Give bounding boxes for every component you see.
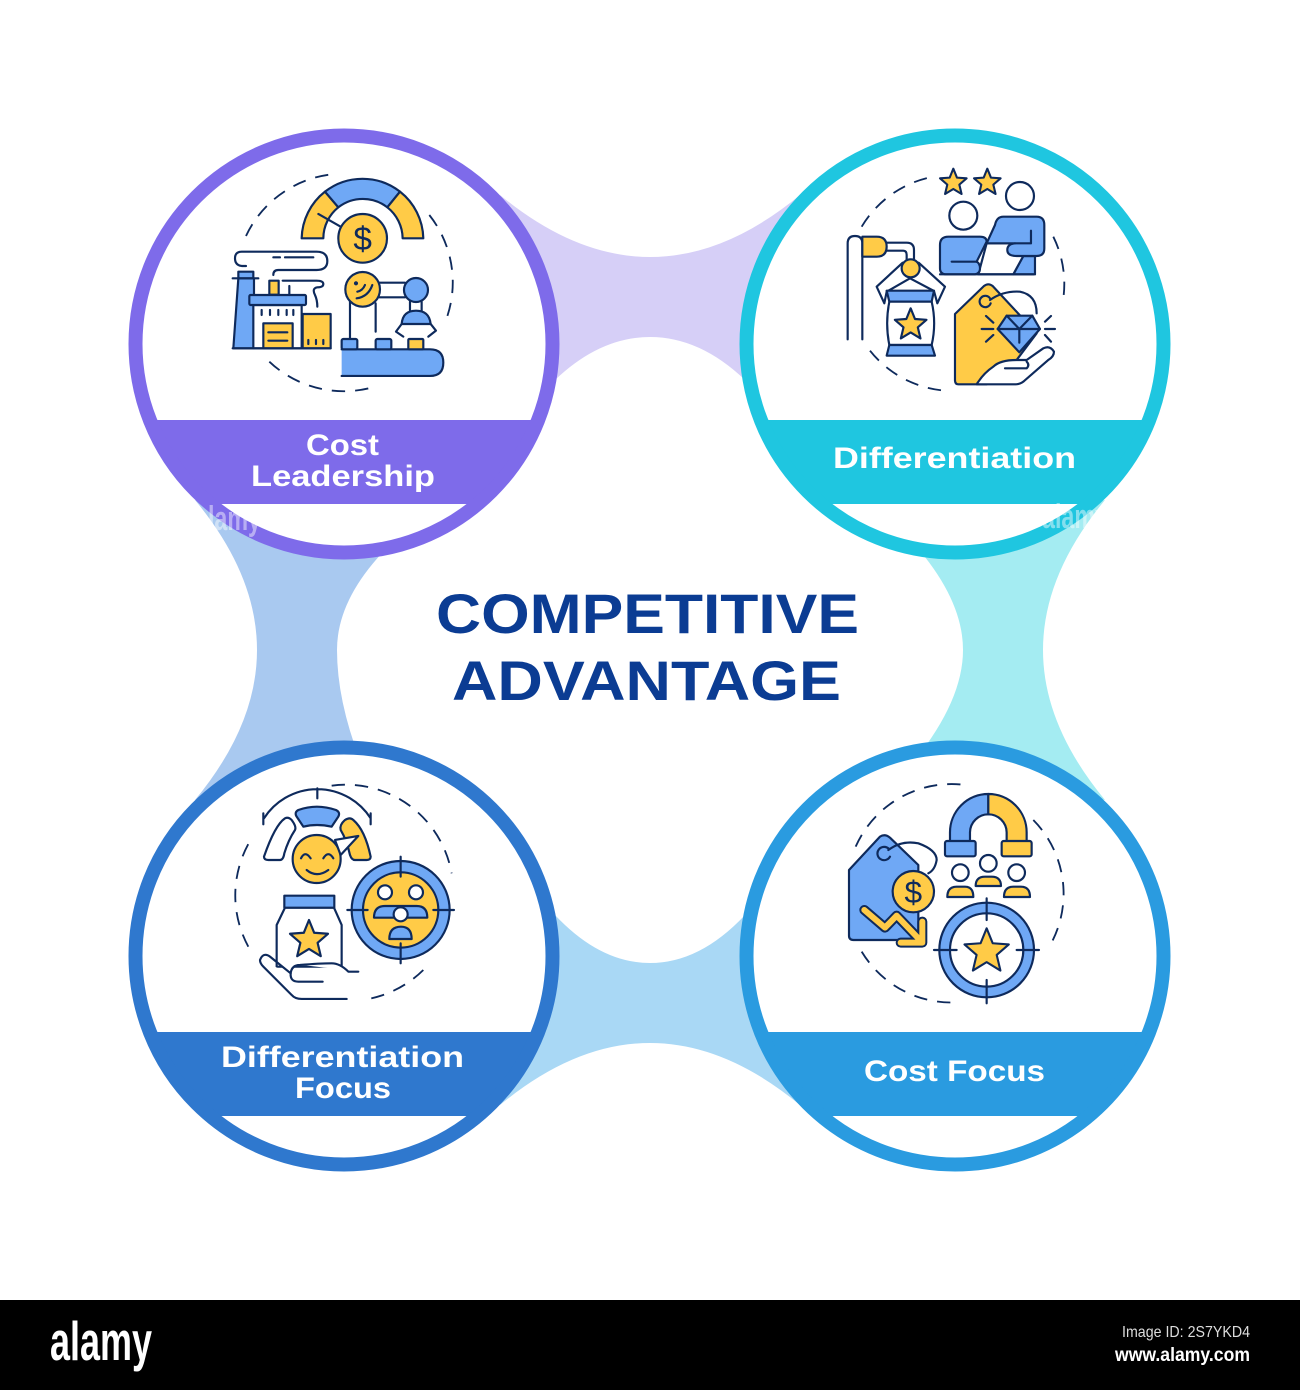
watermark: left connector: alamy — [195, 500, 261, 538]
icon: price tag, customer magnet and target star — [849, 784, 1064, 1003]
banner: cost focus: Cost Focus — [864, 1055, 1045, 1088]
panel: differentiation focus — [120, 747, 570, 1165]
icon: people, packaging robot and premium price tag — [848, 169, 1064, 391]
banner: differentiation — [768, 420, 1142, 504]
icon: price tag, customer magnet and target star: $ — [905, 874, 923, 910]
connector: bottom — [500, 915, 800, 1105]
title: COMPETITIVE — [436, 582, 859, 645]
footer bar — [0, 1300, 1300, 1390]
footer logo: alamy — [50, 1310, 152, 1372]
title: ADVANTAGE — [452, 649, 841, 712]
icon: factory, price gauge and robot arm — [233, 174, 453, 391]
connector: left — [195, 500, 385, 800]
banner: differentiation focus: Focus — [295, 1072, 391, 1105]
watermark: right connector: alamy — [1042, 498, 1108, 536]
panel: differentiation — [730, 135, 1180, 553]
title — [436, 582, 859, 712]
footer image id: Image ID: 2S7YKD4 — [1122, 1324, 1250, 1341]
banner: cost focus — [768, 1032, 1142, 1116]
banner: differentiation: Differentiation — [833, 442, 1076, 475]
banner: cost leadership — [158, 420, 530, 504]
icon: customer satisfaction, product jar and target audience — [235, 785, 454, 999]
connector: top — [500, 195, 800, 380]
banner: differentiation focus: Differentiation — [221, 1041, 464, 1074]
connector: right — [915, 500, 1105, 800]
banner: differentiation focus — [158, 1032, 530, 1116]
icon: factory, price gauge and robot arm: $ — [353, 221, 372, 258]
panel: cost leadership — [120, 135, 570, 553]
banner: cost leadership: Leadership — [251, 460, 435, 493]
banner: cost leadership: Cost — [306, 429, 379, 462]
panel: cost focus — [730, 747, 1180, 1165]
footer website: www.alamy.com — [1114, 1345, 1250, 1366]
